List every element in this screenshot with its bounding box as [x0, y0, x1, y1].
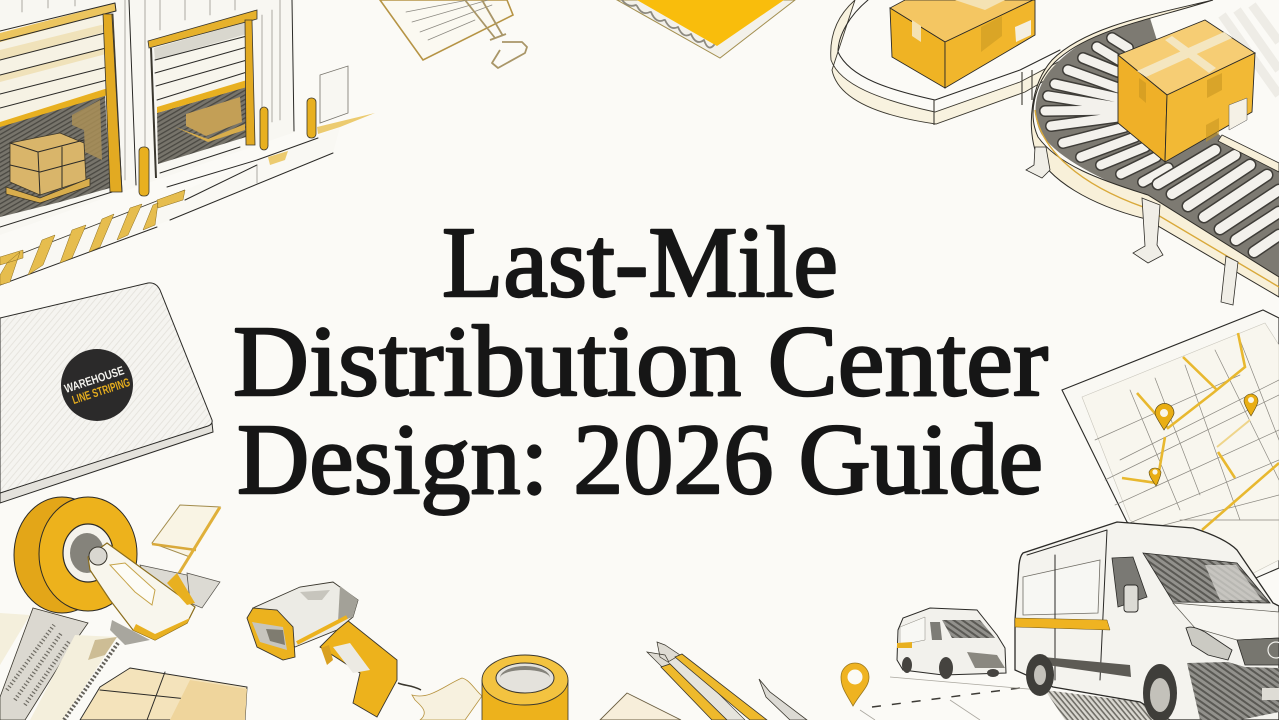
- spiral pad: [0, 613, 117, 720]
- hood: [1173, 603, 1279, 640]
- illustration: utility knives and pencil: [647, 642, 807, 720]
- map pins: [1149, 394, 1258, 486]
- dock platform with hazard stripes: [0, 113, 375, 285]
- title: Last-Mile: [442, 206, 838, 318]
- door window: [1112, 557, 1147, 607]
- binder clip: [465, 0, 527, 68]
- box on small conveyor: [890, 0, 1035, 88]
- illustration: small conveyor with box: [831, 0, 1068, 125]
- illustration: warehouse loading dock: [0, 0, 375, 285]
- illustration: roller conveyor with box: [1026, 0, 1279, 305]
- yellow side stripe: [1015, 618, 1110, 630]
- conveyor outer rail: [1031, 0, 1279, 297]
- cable: [398, 683, 421, 690]
- illustration: tape roll: [412, 655, 568, 720]
- conveyor legs: [1026, 147, 1238, 305]
- title: Design: 2026 Guide: [237, 403, 1043, 515]
- clipboard: [380, 0, 513, 60]
- dispenser arm: [88, 543, 195, 640]
- illustration: folded paper: [600, 693, 681, 720]
- illustration: large delivery van: [1015, 522, 1279, 720]
- pallet of boxes: [6, 100, 102, 203]
- grille: [1237, 638, 1279, 665]
- curved rollers: [1045, 38, 1168, 182]
- illustration: tape dispenser: [0, 497, 220, 720]
- laptop lid: [0, 283, 212, 493]
- notebook spiral: [622, 0, 714, 48]
- scanner head: [247, 608, 295, 660]
- safety bollards: [139, 98, 316, 196]
- knife blade: [647, 642, 680, 667]
- side mirror: [1124, 585, 1138, 612]
- illustration: laptop with sticker: [0, 283, 213, 503]
- illustration: street map with route pins: [1062, 310, 1279, 590]
- destination pin: [841, 663, 869, 706]
- sticker: [61, 349, 133, 421]
- knife body: [668, 655, 745, 720]
- title: [233, 206, 1048, 515]
- tape roll: [14, 497, 137, 613]
- laptop base: [0, 423, 213, 503]
- illustration: barcode scanner: [247, 582, 421, 717]
- rear window: [1023, 560, 1100, 615]
- small conveyor rail: [831, 0, 1068, 124]
- sticker: LINE STRIPING: [70, 375, 132, 407]
- lower dark trim: [1043, 657, 1131, 677]
- wheels: [1026, 654, 1177, 720]
- conveyor bed: [1036, 18, 1279, 283]
- headlight: [1186, 627, 1232, 660]
- illustration: spiral pad and cardboard box: [0, 613, 247, 720]
- pencil: [759, 679, 807, 720]
- road markings: [872, 688, 1020, 707]
- sticker: WAREHOUSE: [63, 363, 126, 396]
- box on roller conveyor: [1118, 20, 1255, 162]
- faded upper rollers: [1222, 5, 1279, 95]
- tape strip: [412, 678, 482, 720]
- title: Distribution Center: [233, 305, 1048, 417]
- warehouse wall: [0, 0, 295, 235]
- windshield: [1143, 553, 1270, 603]
- illustration: clipboard with binder clip: [380, 0, 527, 68]
- scanner handle: [320, 620, 397, 717]
- inner rail: [1218, 135, 1279, 172]
- illustration: road and destination pin: [841, 663, 1180, 720]
- illustration: small delivery van: [897, 608, 1006, 679]
- illustration: yellow spiral notebook: [617, 0, 795, 58]
- route lines: [1122, 333, 1279, 530]
- dock door 2: [148, 10, 257, 178]
- handle flap: [152, 505, 220, 557]
- grip handle: [0, 608, 88, 720]
- straight rollers: [1158, 150, 1279, 252]
- ground shadow: [1045, 690, 1180, 720]
- scanner body: [253, 582, 358, 647]
- dock door 1: [0, 3, 122, 217]
- street grid: [1095, 340, 1279, 530]
- van body: [1015, 522, 1279, 720]
- cardboard box: [80, 668, 247, 720]
- front bumper: [1187, 662, 1279, 720]
- map sheet: [1062, 310, 1279, 590]
- utility door: [320, 66, 348, 123]
